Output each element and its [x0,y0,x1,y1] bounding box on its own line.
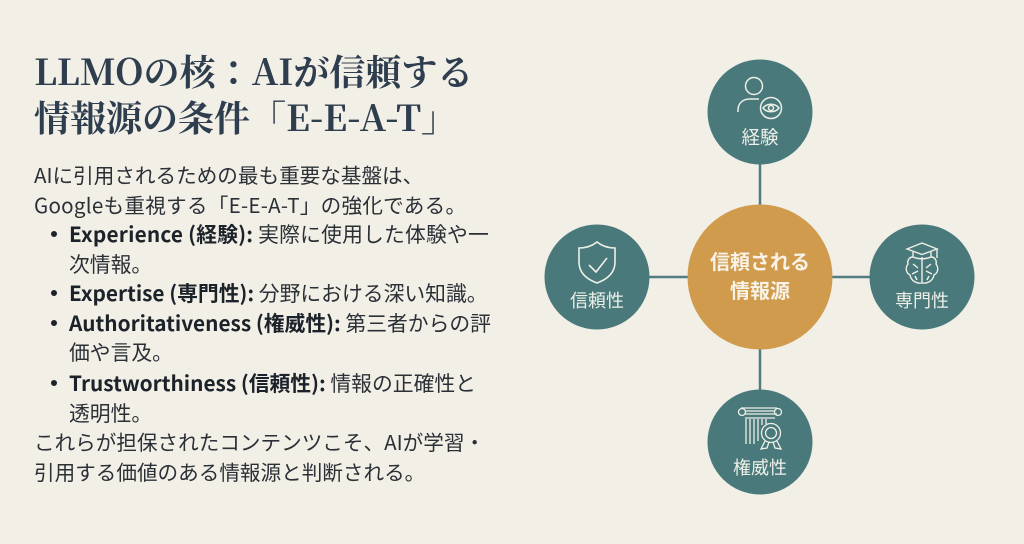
bullet: Trustworthiness [51,367,476,427]
bullet: Experience [51,218,489,278]
icon: person with eye [738,78,782,118]
node: 経験 [708,60,812,164]
label: 経験 [741,124,779,150]
title: LLMOの核：AIが信頼する [34,45,473,96]
bullet: Expertise: Expertise (専門性): 分野における深い知識。 [69,277,488,307]
intro text: Googleも重視する「E-E-A-T」の強化である。 [34,189,466,219]
bullet: Experience: 次情報。 [69,248,152,278]
node: 専門性 [870,224,974,330]
icon: column with award rosette [738,408,782,449]
closing text: 引用する価値のある情報源と判断される。 [34,456,425,486]
bullet: Authoritativeness: 価や言及。 [69,336,173,366]
closing text: これらが担保されたコンテンツこそ、AIが学習・ [34,426,485,456]
title: 情報源の条件「E-E-A-T」 [34,91,457,142]
title [34,45,473,142]
bullet list: E-E-A-T [51,218,491,427]
icon: brain with graduation cap [906,243,938,283]
bullet: Trustworthiness: 透明性。 [69,397,152,427]
center hub: 信頼される情報源: 情報源 [730,275,790,304]
intro text [34,159,466,219]
center hub: 信頼される情報源 [688,204,832,350]
bullet: Trustworthiness: Trustworthiness (信頼性): 情報の正確性と [69,367,476,397]
node: 信頼性 [544,224,650,330]
bullet: Authoritativeness [51,307,491,366]
intro text: AIに引用されるための最も重要な基盤は、 [34,159,423,189]
closing text [34,426,485,486]
connector lines [645,160,875,395]
bullet: Authoritativeness: Authoritativeness (権威性): 第三者からの評 [69,307,491,337]
label: 権威性 [733,454,787,480]
label: 信頼性 [570,287,624,313]
icon: shield with check [579,242,615,283]
node: 権威性 [708,390,812,494]
bullet: Experience: Experience (経験): 実際に使用した体験や一 [69,218,489,248]
label: 専門性 [895,287,949,313]
center hub: 信頼される情報源: 信頼される [710,246,810,275]
